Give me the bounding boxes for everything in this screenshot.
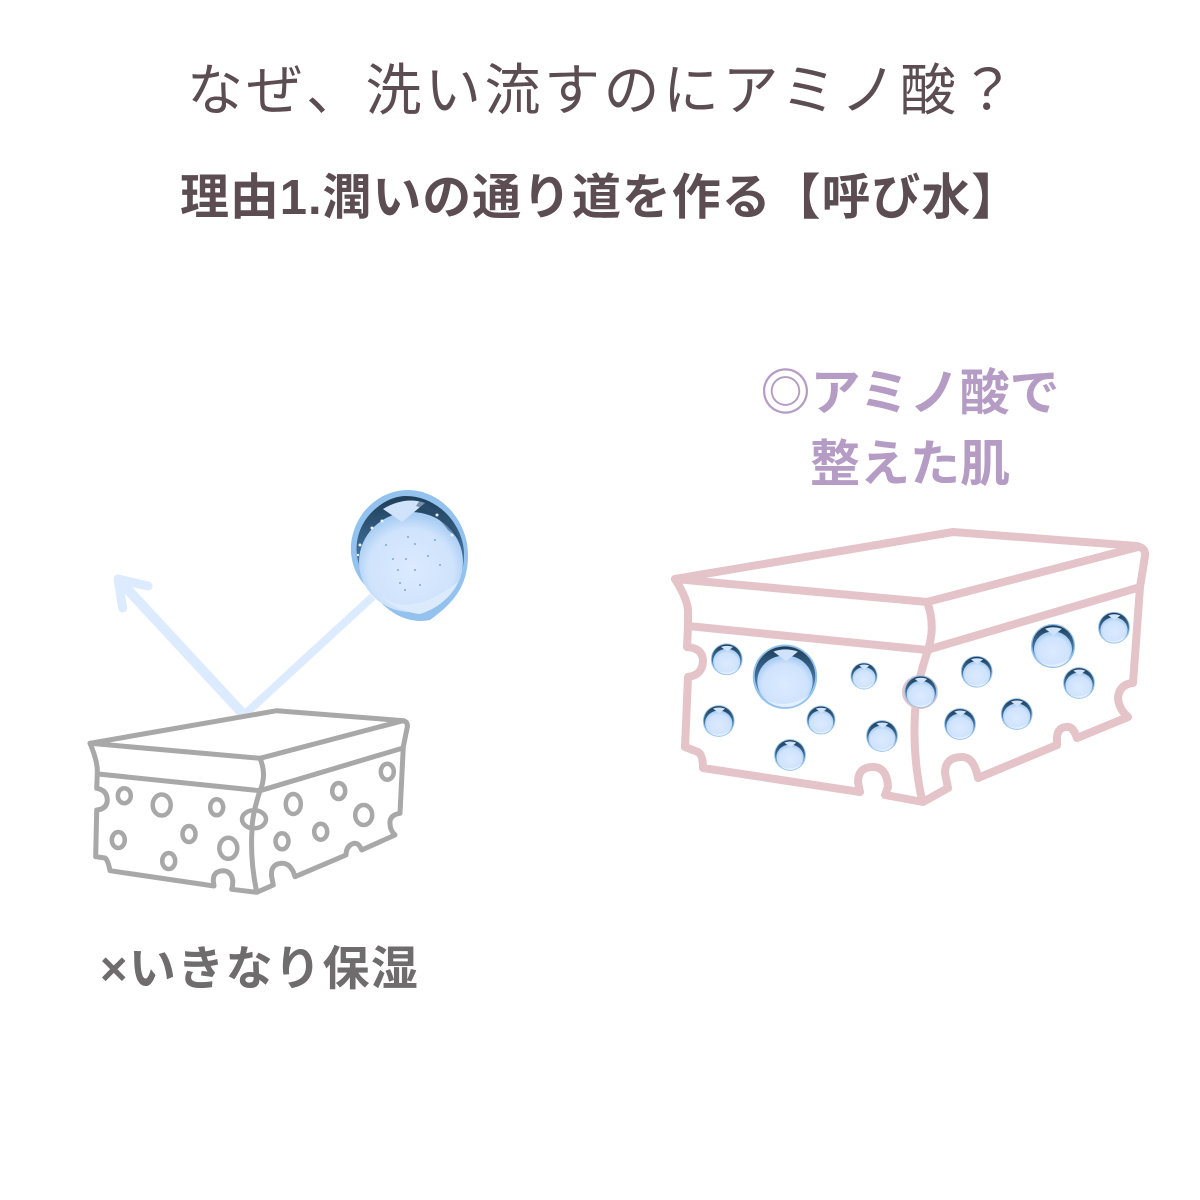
hidden pore [906,679,934,705]
label: immediate moisturizing: ×いきなり保湿 [100,942,419,995]
label: amino acid conditioned skin: 整えた肌 [810,436,1010,492]
label: amino acid conditioned skin: ◎アミノ酸で [760,365,1060,421]
subtitle: 理由1.潤いの通り道を作る【呼び水】 [180,171,1021,225]
icon: hydrated sponge [675,532,1145,802]
title: なぜ、洗い流すのにアミノ酸？ [187,59,1019,122]
icon: water droplet [351,490,468,621]
arrow: water bouncing off surface [118,579,373,715]
sponge outline [90,711,407,892]
water droplets in pores [703,612,1130,771]
sponge outline [675,532,1145,802]
icon: dry sponge [90,711,407,892]
sponge pores [112,764,394,869]
label: amino acid conditioned skin [760,365,1060,492]
